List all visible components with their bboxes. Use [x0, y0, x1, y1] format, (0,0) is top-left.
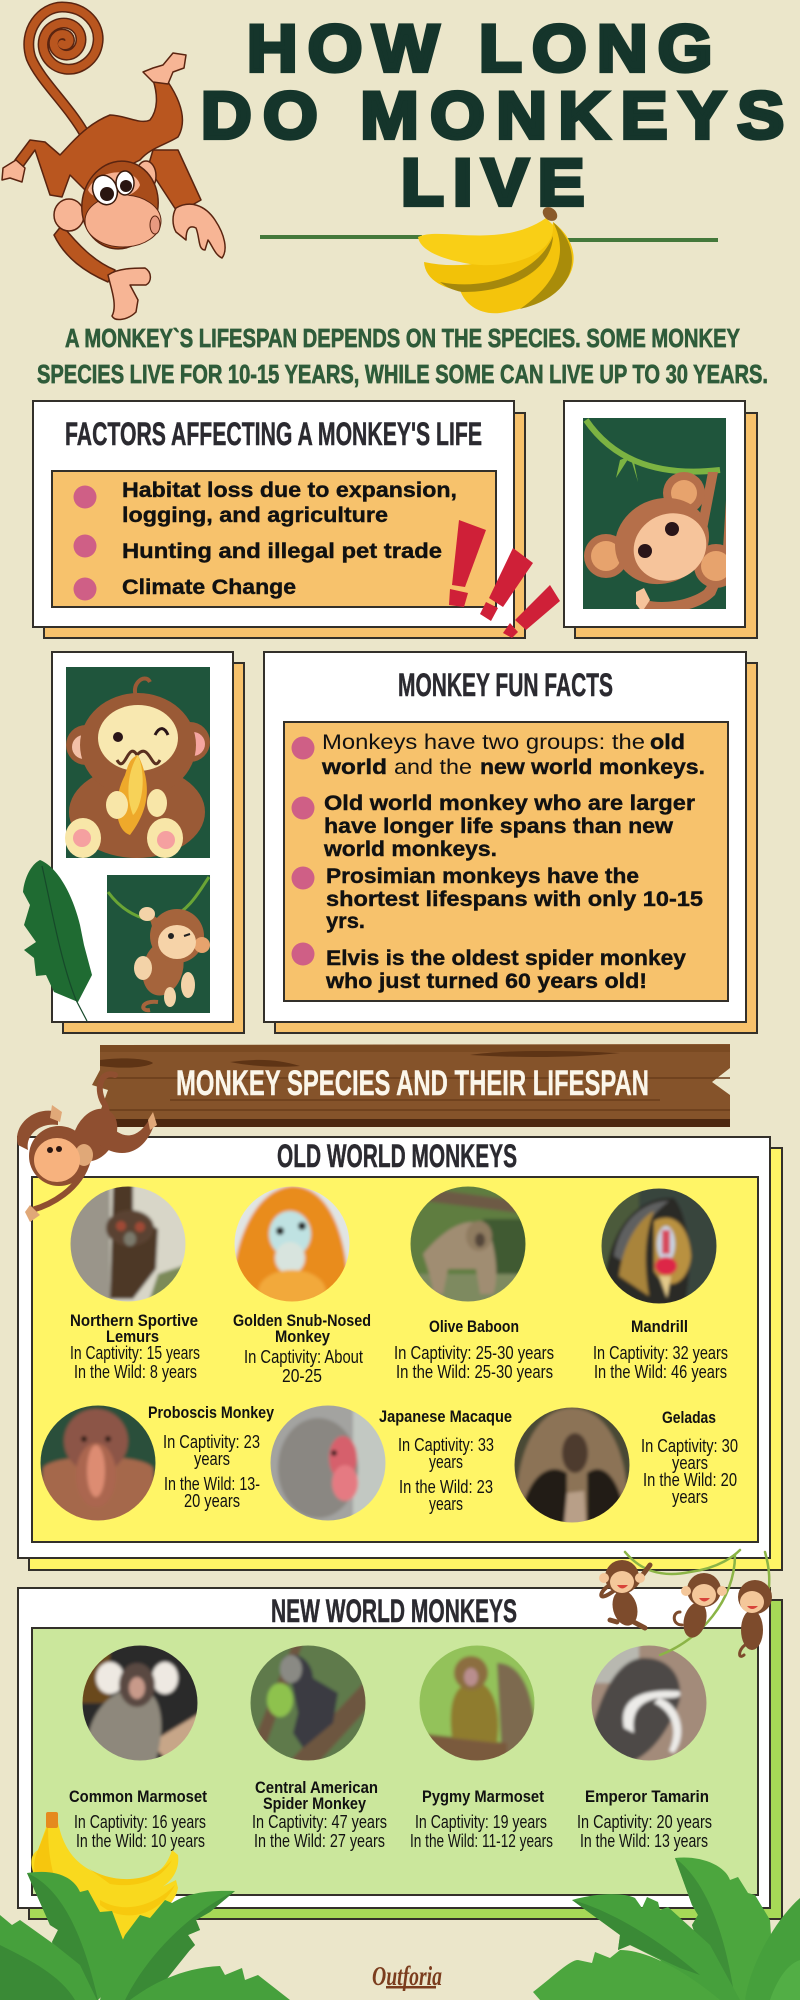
species: geladas: years: [672, 1453, 708, 1473]
species: geladas: In Captivity: 30: [641, 1436, 738, 1456]
species: proboscis monkey: Proboscis Monkey: [148, 1403, 274, 1422]
photo: common marmoset: [80, 1643, 200, 1763]
heading: NEW WORLD MONKEYS: [271, 1593, 517, 1629]
species: golden snub-nosed monkey: Golden Snub-Nosed: [233, 1311, 371, 1330]
photo: mandrill: [599, 1186, 719, 1306]
species: olive baboon: In Captivity: 25-30 years: [394, 1343, 554, 1363]
heading: OLD WORLD MONKEYS: [277, 1138, 517, 1174]
species: common marmoset: Common Marmoset: [69, 1787, 207, 1806]
species: proboscis monkey: In the Wild: 13-: [164, 1474, 260, 1494]
divider line: [260, 235, 718, 242]
species: common marmoset: In the Wild: 10 years: [76, 1831, 205, 1851]
species: emperor tamarin: [577, 1787, 712, 1851]
factor list: logging, and agriculture: [122, 504, 388, 527]
species: mandrill: Mandrill: [631, 1317, 688, 1336]
photo: emperor tamarin: [589, 1643, 709, 1763]
title: HOW LONG: [247, 12, 712, 86]
species: pygmy marmoset: Pygmy Marmoset: [422, 1787, 544, 1806]
fact list: shortest lifespans with only 10-15: [326, 888, 703, 911]
panel: fun facts: [264, 652, 757, 1033]
fact list: Elvis is the oldest spider monkey: [326, 947, 686, 970]
species: golden snub-nosed monkey: In Captivity: About: [244, 1347, 363, 1367]
species: northern sportive lemurs: [70, 1311, 200, 1382]
species: geladas: [641, 1408, 738, 1507]
fact list: Monkeys have two groups: the: [322, 731, 645, 754]
species: japanese macaque: years: [429, 1494, 463, 1514]
species: golden snub-nosed monkey: 20-25: [282, 1366, 322, 1386]
species: geladas: Geladas: [662, 1408, 716, 1427]
species: olive baboon: Olive Baboon: [429, 1317, 519, 1336]
species: olive baboon: [394, 1317, 554, 1382]
species: mandrill: [593, 1317, 728, 1382]
icon: red exclamation marks: [449, 520, 560, 638]
illustration: monkey with banana: [65, 667, 210, 858]
species: emperor tamarin: Emperor Tamarin: [585, 1787, 709, 1806]
species: golden snub-nosed monkey: [233, 1311, 371, 1386]
species: central american spider monkey: Central American: [255, 1778, 378, 1797]
panel: monkey on vine: [564, 401, 757, 638]
factor list: [52, 471, 496, 607]
logo: Outforia: Outforia: [372, 1961, 442, 1991]
species: japanese macaque: [379, 1407, 512, 1514]
species: northern sportive lemurs: Northern Sportive: [70, 1311, 198, 1330]
fact list: who just turned 60 years old!: [325, 970, 647, 993]
photo: pygmy marmoset: [417, 1643, 537, 1763]
species: olive baboon: In the Wild: 25-30 years: [396, 1362, 553, 1382]
species: northern sportive lemurs: In Captivity: 15 years: [70, 1343, 200, 1363]
species: central american spider monkey: In the Wild: 27 years: [254, 1831, 385, 1851]
illustration: swinging monkey: [107, 875, 210, 1013]
photo: northern sportive lemur: [68, 1184, 188, 1304]
fact list: world monkeys.: [323, 838, 497, 861]
fact list: yrs.: [326, 910, 365, 933]
species: proboscis monkey: 20 years: [184, 1491, 240, 1511]
species: mandrill: In Captivity: 32 years: [593, 1343, 728, 1363]
species: mandrill: In the Wild: 46 years: [594, 1362, 727, 1382]
species: central american spider monkey: In Captivity: 47 years: [252, 1812, 387, 1832]
photo: gelada: [512, 1405, 632, 1525]
factor list: Climate Change: [122, 576, 296, 599]
species: pygmy marmoset: [410, 1787, 553, 1851]
species: proboscis monkey: years: [194, 1449, 230, 1469]
species: emperor tamarin: In the Wild: 13 years: [580, 1831, 708, 1851]
fact list: old: [650, 731, 685, 754]
photo: golden snub-nosed monkey: [234, 1186, 350, 1302]
species: emperor tamarin: In Captivity: 20 years: [577, 1812, 712, 1832]
species: northern sportive lemurs: Lemurs: [106, 1327, 159, 1346]
species: proboscis monkey: [148, 1403, 274, 1511]
species: proboscis monkey: In Captivity: 23: [163, 1432, 260, 1452]
title: [201, 12, 784, 220]
icon: banana leaf: [23, 860, 92, 1021]
photo: olive baboon: [408, 1184, 528, 1304]
tail: [29, 7, 98, 133]
hands and feet: [2, 53, 225, 319]
factor list: Habitat loss due to expansion,: [122, 479, 457, 502]
illustration: three monkeys on vines: [599, 1550, 772, 1656]
species: central american spider monkey: [252, 1778, 387, 1851]
panel: factors: [33, 401, 525, 638]
species: japanese macaque: In Captivity: 33: [398, 1435, 494, 1455]
fact list: Old world monkey who are larger: [324, 792, 695, 815]
head: [54, 199, 84, 231]
heading: FACTORS AFFECTING A MONKEY'S LIFE: [65, 416, 482, 452]
heading: MONKEY FUN FACTS: [398, 667, 613, 703]
photo: central american spider monkey: [248, 1643, 368, 1763]
illustration: bottom banana bunch: [31, 1812, 178, 1950]
species: japanese macaque: years: [429, 1452, 463, 1472]
species: geladas: In the Wild: 20: [643, 1470, 737, 1490]
panel: new world monkeys: [18, 1588, 782, 1919]
species: common marmoset: [69, 1787, 207, 1851]
species: northern sportive lemurs: In the Wild: 8 years: [74, 1362, 197, 1382]
panel: old world monkeys: [18, 1137, 782, 1570]
fact list: and the: [394, 756, 472, 779]
limbs and torso: [15, 80, 201, 282]
title: LIVE: [401, 146, 584, 220]
species: pygmy marmoset: In Captivity: 19 years: [415, 1812, 547, 1832]
factor list: Hunting and illegal pet trade: [122, 540, 442, 563]
illustration: hanging monkey: [2, 7, 225, 319]
species: japanese macaque: Japanese Macaque: [379, 1407, 512, 1426]
panel: monkey images: [52, 652, 244, 1033]
species: common marmoset: In Captivity: 16 years: [74, 1812, 206, 1832]
species: golden snub-nosed monkey: Monkey: [275, 1327, 330, 1346]
illustration: right palm leaves: [533, 1857, 800, 2000]
wooden sign banner: [92, 1044, 730, 1127]
illustration: left palm leaves: [0, 1872, 290, 2000]
species: geladas: years: [672, 1487, 708, 1507]
fact list: [284, 722, 728, 1001]
species: japanese macaque: In the Wild: 23: [399, 1477, 493, 1497]
illustration: monkey hanging from sign: [17, 1074, 157, 1222]
intro text: [37, 323, 768, 389]
fact list: world: [321, 756, 387, 779]
photo: proboscis monkey: [38, 1403, 158, 1523]
species: pygmy marmoset: In the Wild: 11-12 years: [410, 1831, 553, 1851]
title: DO MONKEYS: [201, 79, 784, 153]
fact list: have longer life spans than new: [324, 815, 674, 838]
icon: banana bunch: [418, 204, 574, 313]
fact list: Prosimian monkeys have the: [326, 865, 639, 888]
photo: japanese macaque: [268, 1403, 388, 1523]
fact list: new world monkeys.: [480, 756, 705, 779]
species: central american spider monkey: Spider Monkey: [263, 1794, 366, 1813]
